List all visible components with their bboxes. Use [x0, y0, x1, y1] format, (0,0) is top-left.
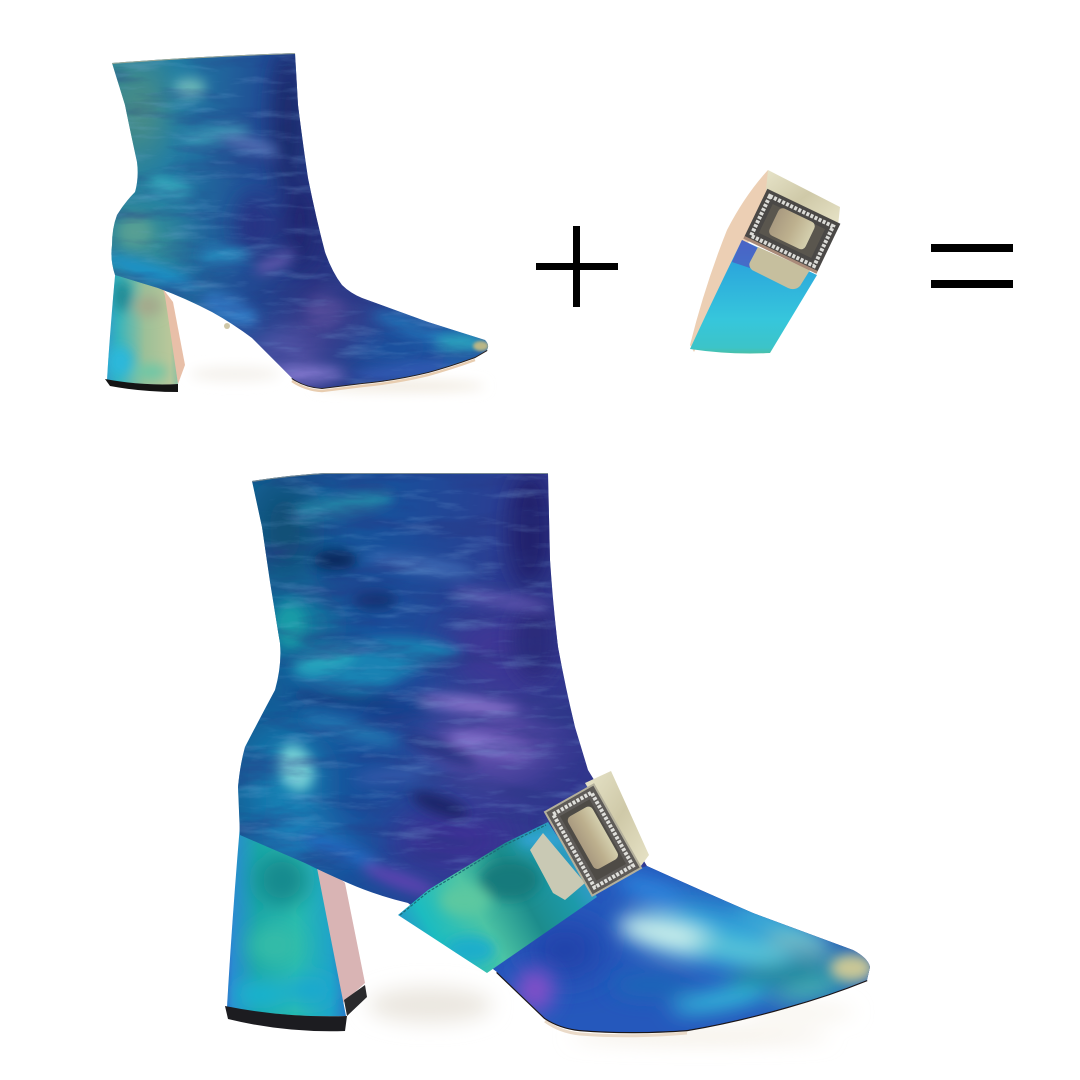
large boot sole — [497, 972, 867, 1036]
strap lining — [690, 170, 772, 352]
small boot upper — [100, 50, 500, 395]
large boot heel — [220, 820, 367, 1031]
small iridescent boot — [100, 50, 500, 395]
strap purple fold — [732, 240, 757, 268]
icon: plus sign — [536, 226, 618, 307]
strap buckle — [743, 189, 840, 274]
small boot charm — [224, 323, 230, 329]
large boot shadow — [368, 987, 855, 1041]
small boot heel — [105, 275, 185, 392]
strap tongue — [749, 247, 810, 289]
strap back tab — [766, 170, 840, 226]
icon: equals sign — [931, 244, 1013, 288]
large boot strap tongue — [530, 833, 585, 900]
small strap accessory — [690, 170, 840, 354]
large boot strap — [398, 822, 597, 973]
small boot sole — [292, 350, 487, 391]
large iridescent boot — [220, 465, 880, 1045]
large boot strap back tab — [585, 771, 649, 870]
strap body — [690, 240, 817, 354]
small boot shadow — [190, 367, 485, 391]
large boot upper — [230, 465, 880, 1045]
large boot vamp and toe — [480, 866, 880, 1040]
large boot buckle — [545, 784, 641, 896]
